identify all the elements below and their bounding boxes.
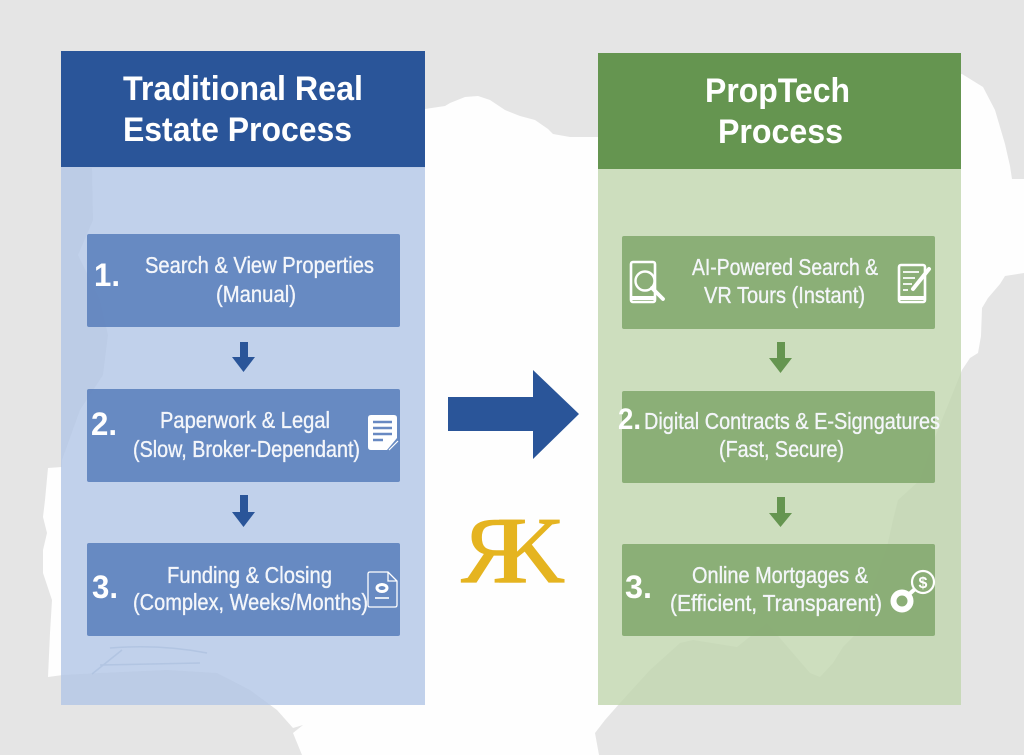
step 2: paperwork and legal: 2. xyxy=(91,406,117,442)
arrow: proptech step 1 to step 2 xyxy=(769,342,792,373)
step 2: paperwork and legal: (Slow, Broker-Dependant) xyxy=(133,436,360,462)
icon: key with dollar coin xyxy=(894,571,934,610)
arrow: proptech step 2 to step 3 xyxy=(769,497,792,527)
step 3: online mortgages: Online Mortgages & xyxy=(692,562,868,588)
step 2: digital contracts and e-signatures xyxy=(618,391,940,483)
icon: key with dollar coin: $ xyxy=(919,575,928,592)
icon: tablet with pen xyxy=(899,265,929,302)
step 1: AI-powered search and VR tours: VR Tours (Instant) xyxy=(704,282,865,308)
heading: proptech process: Process xyxy=(718,113,843,151)
step 3: funding and closing: Funding & Closing xyxy=(167,562,332,588)
step 2: digital contracts and e-signatures: Digital Contracts & E-Signgatures xyxy=(644,408,940,434)
step 3: funding and closing: 3. xyxy=(92,569,118,605)
arrow: traditional to proptech xyxy=(448,370,579,459)
icon: phone with magnifier xyxy=(631,262,663,302)
heading: proptech process: PropTech xyxy=(705,72,850,110)
step 2: paperwork and legal xyxy=(87,389,400,482)
faint scribble mark xyxy=(92,647,207,674)
step 3: funding and closing: (Complex, Weeks/Months) xyxy=(133,589,368,615)
step 3: online mortgages: (Efficient, Transparent) xyxy=(670,590,882,616)
heading: traditional real estate process: Traditional Real xyxy=(123,70,363,108)
logo: RK monogram: R xyxy=(461,499,524,603)
heading: proptech process xyxy=(598,53,961,169)
arrow: step 1 to step 2 xyxy=(232,342,255,372)
icon: document xyxy=(368,415,398,450)
panel: traditional real estate process xyxy=(61,51,425,705)
step 2: digital contracts and e-signatures: (Fast, Secure) xyxy=(719,436,844,462)
panel: proptech process xyxy=(598,53,961,705)
step 2: digital contracts and e-signatures: 2. xyxy=(618,403,641,436)
heading: traditional real estate process: Estate Process xyxy=(123,111,352,149)
step 3: online mortgages xyxy=(622,544,935,636)
panel body: traditional xyxy=(61,167,425,705)
step 1: AI-powered search and VR tours xyxy=(622,236,935,329)
arrow: step 2 to step 3 xyxy=(232,495,255,527)
step 3: online mortgages: 3. xyxy=(625,569,652,605)
panel body: proptech xyxy=(598,169,961,705)
step 1: search and view properties xyxy=(87,234,400,327)
step 1: AI-powered search and VR tours: AI-Powered Search & xyxy=(692,254,878,280)
step 3: funding and closing xyxy=(87,543,400,636)
logo: RK monogram xyxy=(461,499,565,603)
heading: traditional real estate process xyxy=(61,51,425,167)
step 1: search and view properties: (Manual) xyxy=(216,281,296,307)
icon: contract file xyxy=(368,572,397,607)
step 1: search and view properties: Search & View Properties xyxy=(145,252,374,278)
logo: RK monogram: K xyxy=(497,499,565,603)
step 2: paperwork and legal: Paperwork & Legal xyxy=(160,407,330,433)
step 1: search and view properties: 1. xyxy=(94,257,120,293)
